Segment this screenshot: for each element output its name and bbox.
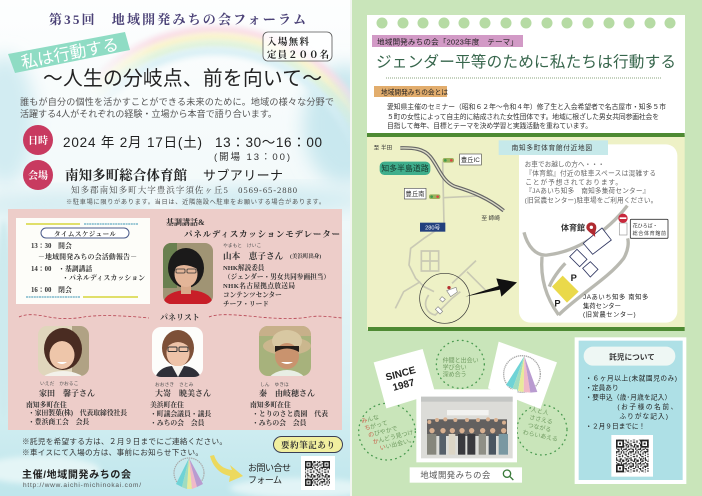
interchange: 豊丘IC (443, 154, 481, 165)
about text (387, 102, 666, 130)
panelist 3 profile: しん ゆきほ (260, 381, 289, 388)
title: 第35回 地域開発みちの会フォーラム (49, 12, 306, 28)
moderator heading: 基調講話& (166, 217, 205, 227)
interchange: 豊丘IC: 豊丘IC (461, 155, 480, 164)
JA label: JAあいち知多 南知多 (583, 292, 648, 301)
photo: panelist 3 (259, 326, 311, 376)
panelists divider heading (19, 313, 342, 322)
panelist 1 profile (26, 380, 127, 426)
venue row: ※駐車場に限りがあります。当日は、近隣施設へ駐車をお願いする場合があります。 (66, 198, 325, 206)
bus stop: 総合体育館前 (633, 230, 666, 237)
group photo (416, 389, 517, 462)
panelist 1 profile: ・家田製菓(株) 代表取締役社長 (28, 408, 127, 417)
card: SINCE 1987: 1987 (392, 377, 416, 394)
theme heading: ジェンダー平等のために私たちは行動する (376, 53, 676, 71)
photo: panelist 2 (152, 327, 203, 378)
note card (367, 15, 685, 135)
schedule box: 16：00 閉会 (31, 285, 72, 294)
schedule box: タイムスケジュール (54, 230, 116, 238)
date row: (開場 13：00) (214, 151, 290, 163)
dotted bubble: 人と人 (517, 405, 567, 455)
detail map panel: 南知多町体育館付近地図 (512, 143, 592, 152)
interchange: 豊丘南 (404, 188, 440, 199)
moderator profile: チーフ・リード (223, 300, 269, 308)
panelist 2 profile: 大嵜 暁美さん (155, 388, 211, 398)
moderator profile: 山本 恵子さん (223, 250, 284, 261)
panelist 3 profile (250, 381, 328, 427)
notes: ※託児を希望する方は、２月９日までにご連絡ください。 (22, 436, 227, 446)
JA label (583, 292, 648, 319)
venue row: 知多郡南知多町大字豊浜字須佐ヶ丘5 0569-65-2880 (71, 184, 297, 195)
panelist 2 profile: おおさき さとみ (155, 381, 194, 388)
panel: childcare (575, 337, 686, 484)
contact form label: フォーム (248, 475, 282, 485)
JA label: 集荷センター (583, 301, 621, 310)
area map roads (395, 148, 504, 315)
dotted bubble: みんな: かんどう見つけ (372, 428, 414, 446)
tag: 私は行動する: 私は行動する (20, 35, 120, 72)
card: rainbow logo (488, 342, 557, 409)
card: SINCE 1987: SINCE (385, 365, 417, 384)
QR code: contact (301, 456, 335, 490)
moderator profile: NHK名古屋拠点放送局 (223, 281, 295, 290)
schedule box: ・パネルディスカッション (62, 274, 145, 282)
notes (22, 436, 227, 457)
theme label: 地域開発みちの会「2023年度 テーマ」 (377, 36, 518, 46)
panel: childcare: ・２月９日までに！ (585, 422, 645, 430)
dotted bubble: 仲間と出会い: 深め合う (443, 371, 467, 379)
schedule box: 14：00 ・基調講話 (31, 264, 92, 273)
panelist 1 profile: 家田 馨子さん (39, 388, 95, 398)
contact form label (248, 462, 291, 485)
notes: ※車イスにて入場の方は、事前にお知らせ下さい。 (22, 447, 203, 457)
moderator profile: (美浜町出身) (290, 252, 321, 260)
panelists divider heading: パネリスト (160, 313, 200, 322)
panel: childcare: ・要申込（歳･月歳を記入） (585, 393, 671, 402)
detail map text: お車でお越しの方へ・・・ (525, 159, 605, 168)
intro text: 誰もが自分の個性を活かすことができる未来のために。地域の様々な分野で (20, 96, 334, 107)
panel: childcare: ・定員あり (585, 384, 619, 392)
divider between pages (350, 0, 352, 496)
dotted bubble: みんな: みんな (361, 414, 380, 425)
admission badge: 定員２００名 (267, 49, 329, 61)
dotted bubble: みんな: のびやかで (367, 424, 398, 439)
bus stop (618, 214, 668, 238)
gymnasium pin: 体育館 (561, 222, 585, 232)
road label: 知多半島道路: 知多半島道路 (381, 163, 429, 173)
detail map panel (499, 140, 677, 323)
parking area (552, 276, 579, 303)
panelist 1 profile: 南知多町在住 (26, 400, 67, 409)
panelist 2 profile (150, 381, 211, 427)
contact form label: お問い合せ (248, 462, 291, 473)
dotted bubble: 人と人: つながる (527, 421, 552, 434)
dotted bubble: 仲間と出会い: 仲間と出会い (443, 356, 479, 364)
pill: 要約筆記あり (274, 436, 342, 452)
moderator profile: コンテンツセンター (223, 291, 282, 299)
panelist 3 profile: 秦 由岐穂さん (259, 388, 315, 398)
search bar (410, 467, 522, 483)
detail map panel: P (571, 273, 577, 283)
dotted bubble: みんな: いい出会い。 (379, 436, 416, 452)
moderator profile: やまもと けいこ (223, 242, 261, 249)
venue row (23, 160, 325, 206)
about label: 地域開発みちの会とは (381, 88, 448, 96)
date row (23, 125, 322, 163)
panelist 1 profile: いえだ かおるこ (40, 380, 78, 387)
panelist 3 profile: ・とりのさと農園 代表 (252, 409, 328, 418)
panel: speakers (8, 209, 342, 430)
dotted bubble: 仲間と出会い: 学び合い (443, 363, 467, 371)
detail map text: ことが予想されております。 (525, 177, 622, 186)
panelist 3 profile: ・みちの会 会員 (252, 418, 307, 427)
detail map heading (499, 140, 608, 155)
detail map text: 『体育館』付近の駐車スペースは混雑する (525, 169, 656, 178)
organiser: http://www.aichi-michinokai.com/ (23, 482, 141, 489)
detail map text (525, 159, 657, 204)
schedule box (16, 218, 150, 304)
panel: childcare: ふりがな記入) (619, 411, 668, 420)
moderator heading: パネルディスカッションモデレーター (184, 229, 340, 239)
about text: ５町の女性によって自主的に結成された女性団体です。地域に根ざした男女共同参画社会を (387, 112, 659, 121)
arrow: to contact form (210, 455, 243, 482)
panelist 1 profile: ・豊浜商工会 会長 (28, 417, 89, 426)
intro text (20, 96, 334, 119)
left page background (0, 24, 350, 496)
panelist 2 profile: 美浜町在住 (150, 400, 184, 409)
dotted bubble: 仲間と出会い (436, 340, 484, 388)
venue row: サブアリーナ (203, 168, 283, 183)
panel: childcare: ・６ヶ月以上(未就園児のみ) (585, 373, 677, 382)
moderator profile (223, 242, 330, 308)
panel: map (367, 133, 685, 331)
pill: 要約筆記あり: 要約筆記あり (281, 440, 335, 450)
admission badge (263, 32, 332, 61)
place labels (374, 143, 500, 222)
panelist 3 profile: 南知多町在住 (250, 400, 291, 409)
about text: 目指して毎年、目標とテーマを決め学習と実践活動を重ねています。 (387, 121, 592, 130)
venue row: 南知多町総合体育館 (65, 167, 188, 183)
search bar: 地域開発みちの会 (420, 470, 491, 480)
route label: 280号 (420, 223, 445, 232)
organiser: 主催/地域開発みちの会 (22, 468, 131, 481)
dotted bubble: 人と人: 人と人 (530, 406, 549, 417)
bottom right collage (359, 337, 686, 484)
dotted bubble: みんな (359, 403, 416, 460)
date row: 13：30～16：00 (215, 135, 322, 150)
JA label: (旧営農センター) (583, 310, 636, 319)
schedule box: －地域開発みちの会活動報告－ (38, 252, 137, 261)
logo: rainbow (174, 458, 204, 489)
road label: 知多半島道路 (380, 162, 430, 175)
date row: 2024 年 2月 17日(土) (63, 135, 202, 150)
organiser (22, 468, 141, 489)
admission badge: 入場無料 (267, 36, 309, 48)
detail circle (420, 273, 470, 323)
dotted bubble: みんな: ちがって (364, 419, 388, 432)
moderator profile: NHK解説委員 (223, 263, 265, 272)
detail map text: 『JAあいち知多 南知多集荷センター』 (525, 186, 649, 195)
panelist 2 profile: ・みちの会 会員 (150, 418, 205, 427)
route label: 280号: 280号 (425, 224, 441, 231)
dotted bubble: 人と人: ささえる (529, 414, 553, 426)
right page background (352, 0, 702, 496)
bus stop: 花ひろば・ (633, 222, 658, 229)
about text: 愛知県主催のセミナー（昭和６２年～令和４年）修了生と入会希望者で名古屋市・知多５市 (387, 102, 666, 111)
main heading: ～人生の分岐点、前を向いて～ (43, 68, 322, 90)
schedule box: 13：30 開会 (31, 241, 72, 250)
venue row: 会場 (28, 169, 48, 182)
moderator profile: （ジェンダー・男女共同参画担当） (224, 272, 330, 281)
detail map panel: P (554, 298, 561, 308)
dotted bubble: 人と人: わらいあえる (522, 429, 558, 443)
detail map text: (旧営農センター)駐車場をご利用ください。 (525, 195, 657, 204)
panel: childcare: 託児について (609, 351, 655, 361)
about label (374, 86, 448, 97)
photo: moderator (163, 243, 213, 304)
intro text: 活躍する4人がそれぞれの経験・立場から本音で語り合います。 (20, 108, 277, 119)
arrow: to detail map (465, 278, 517, 297)
gymnasium pin (561, 222, 596, 237)
panelist 2 profile: ・町議会議員・議長 (150, 409, 211, 418)
card: SINCE 1987 (374, 349, 435, 408)
detail map roads (524, 206, 628, 315)
moderator heading (166, 217, 340, 239)
place labels: 至 師崎 (481, 214, 500, 222)
interchange: 豊丘南: 豊丘南 (406, 189, 424, 198)
date row: 日時 (28, 134, 48, 147)
buildings (570, 228, 611, 277)
photo: panelist 1 (38, 326, 89, 376)
panel: childcare: (お子様の名前、 (617, 402, 677, 411)
place labels: 至 半田 (374, 143, 393, 151)
